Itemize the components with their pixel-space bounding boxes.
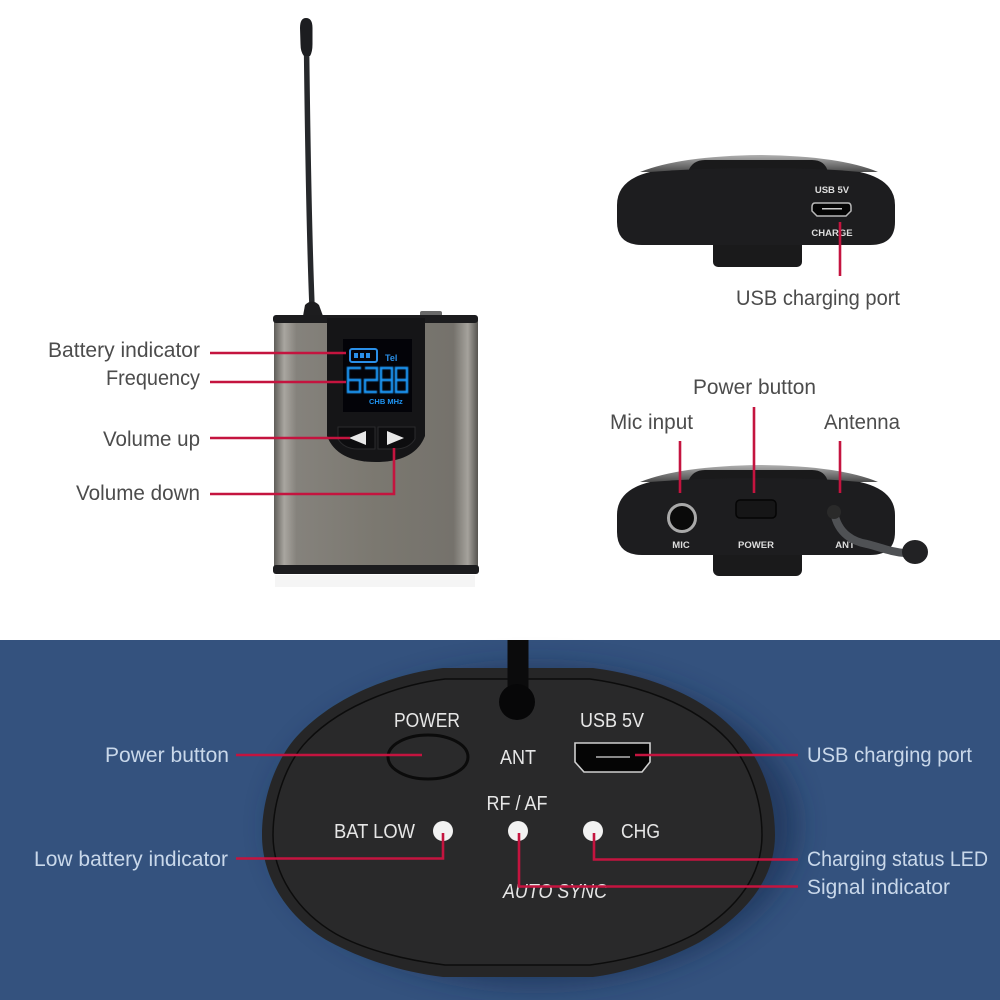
power switch (736, 500, 776, 518)
callout: signal indicator: Signal indicator (807, 876, 950, 899)
battery icon (350, 349, 377, 362)
callout: signal indicator (519, 833, 950, 899)
metal body (274, 318, 478, 568)
LEDs (433, 821, 603, 841)
USB port (575, 743, 650, 772)
device: top view with USB port (617, 155, 895, 267)
mic jack (668, 504, 696, 532)
AUTO SYNC label: AUTO SYNC (502, 881, 607, 903)
callout: power button, bottom view (693, 376, 816, 493)
micro USB port (812, 203, 851, 216)
ANT print: ANT (835, 540, 855, 551)
callout: power button, panel: Power button (105, 744, 229, 767)
signal mark: Tel (385, 353, 397, 363)
CHARGE print: CHARGE (811, 228, 853, 239)
callout: antenna (824, 411, 900, 493)
callout: volume up: Volume up (103, 428, 200, 451)
MIC print: MIC (672, 540, 690, 551)
callout: low battery indicator (34, 833, 443, 871)
channel and MHz text: CHB MHz (369, 397, 403, 406)
device: enlarged bottom face (262, 640, 775, 977)
callout: mic input: Mic input (610, 411, 693, 434)
device: bottom view (617, 465, 928, 576)
callout: low battery indicator: Low battery indicator (34, 848, 228, 871)
POWER print: POWER (738, 540, 774, 551)
LCD screen (343, 339, 412, 412)
callout: charging status LED: Charging status LED (807, 848, 988, 871)
RF / AF label: RF / AF (486, 793, 548, 815)
USB 5V label: USB 5V (580, 710, 645, 732)
antenna (300, 18, 323, 316)
callout: USB charging port, top view: USB charging port (736, 287, 900, 310)
antenna stalk (508, 640, 528, 705)
CHG label: CHG (621, 821, 660, 843)
ANT label: ANT (500, 747, 536, 769)
callout: mic input (610, 411, 693, 493)
POWER label: POWER (394, 710, 460, 732)
control panel (327, 318, 425, 462)
callout: power button, bottom view: Power button (693, 376, 816, 399)
blue panel (0, 640, 1000, 1000)
device: front view (273, 18, 479, 587)
panel shadow (273, 668, 797, 984)
frequency digits (348, 368, 407, 392)
callout: battery indicator: Battery indicator (48, 339, 200, 362)
callout: charging status LED (594, 833, 988, 871)
short antenna (827, 505, 928, 564)
callout: frequency: Frequency (106, 367, 200, 390)
BAT LOW label: BAT LOW (334, 821, 415, 843)
callout: volume down: Volume down (76, 482, 200, 505)
callout: antenna: Antenna (824, 411, 900, 434)
volume buttons (338, 427, 415, 449)
power button (388, 735, 468, 779)
callout: volume down (76, 448, 394, 505)
USB 5V print: USB 5V (815, 185, 850, 196)
callout: USB charging port, panel: USB charging port (807, 744, 972, 767)
